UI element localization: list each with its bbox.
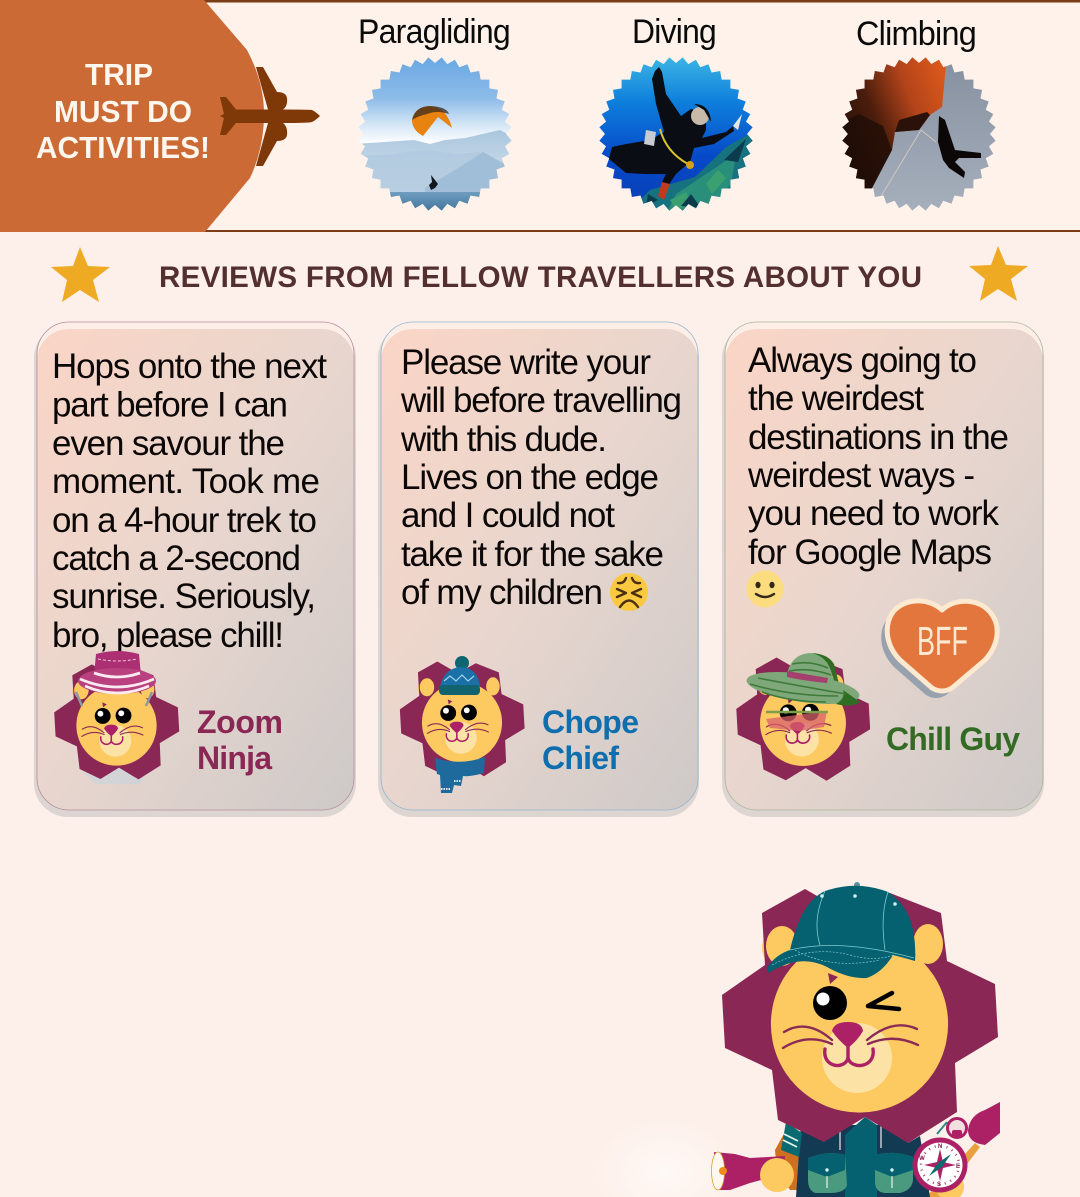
head xyxy=(722,889,998,1143)
heading: diving: Diving xyxy=(632,13,716,51)
tail xyxy=(926,1102,1000,1197)
banner title: MUST DO xyxy=(54,94,192,129)
badge: BFF heart: BFF xyxy=(917,618,968,664)
compass: S xyxy=(937,1182,941,1188)
review text: Always going to xyxy=(748,341,977,380)
lion avatar: beanie and scarf xyxy=(400,656,525,793)
sleeve xyxy=(781,1122,802,1157)
heading: climbing: Climbing xyxy=(856,15,976,53)
review text: Lives on the edge xyxy=(401,458,659,497)
review text: Please write your xyxy=(401,343,651,382)
lion name xyxy=(197,704,283,776)
review text: will before travelling xyxy=(400,381,682,420)
review text: destinations in the xyxy=(748,418,1009,457)
lion name: Ninja xyxy=(197,740,272,776)
review text: the weirdest xyxy=(748,379,924,418)
lion name xyxy=(542,704,639,776)
review text: with this dude. xyxy=(400,420,607,459)
review text: you need to work xyxy=(748,494,1000,533)
badge: BFF heart xyxy=(881,601,997,698)
flashlight xyxy=(712,1152,785,1190)
photo: diving xyxy=(596,54,756,214)
icon: smile emoji xyxy=(746,570,784,608)
photo: climbing xyxy=(839,54,999,214)
panel: review card 1 xyxy=(34,322,356,817)
review text: catch a 2-second xyxy=(52,539,301,578)
icon: left star xyxy=(51,247,110,302)
right pocket xyxy=(875,1153,913,1193)
heading: reviews xyxy=(51,246,1028,302)
cap xyxy=(767,882,915,978)
banner title xyxy=(36,57,210,165)
banner shape xyxy=(0,0,264,232)
lion avatar: hat xyxy=(54,651,179,784)
compass xyxy=(912,1118,968,1192)
banner title: ACTIVITIES! xyxy=(36,130,210,165)
review text: even savour the xyxy=(52,424,285,463)
compass: N xyxy=(938,1144,942,1150)
compass: W xyxy=(919,1156,925,1162)
panel: trip must do activities xyxy=(0,0,1080,232)
review text: bro, please chill! xyxy=(52,616,284,655)
lion avatar: sun hat xyxy=(736,653,870,781)
review text: and I could not xyxy=(401,496,615,535)
panel: review card 2 xyxy=(378,322,699,817)
compass: E xyxy=(956,1164,960,1170)
lion name: Chief xyxy=(542,740,619,776)
icon: persevering emoji xyxy=(610,573,648,611)
lion name: Chope xyxy=(542,704,639,740)
review text: on a 4-hour trek to xyxy=(52,501,317,540)
panel: review card 3 xyxy=(722,322,1044,817)
review text: sunrise. Seriously, xyxy=(52,577,316,616)
review text: part before I can xyxy=(52,385,288,424)
backpack strap xyxy=(775,1130,800,1190)
review text xyxy=(52,347,327,655)
icon: right star xyxy=(969,246,1028,301)
review text: take it for the sake xyxy=(401,535,664,574)
reviews title: REVIEWS FROM FELLOW TRAVELLERS ABOUT YOU xyxy=(159,261,922,294)
mascot: lion explorer xyxy=(593,882,1000,1197)
review text xyxy=(400,343,682,612)
heading: paragliding: Paragliding xyxy=(358,13,510,51)
left pocket xyxy=(808,1153,847,1193)
review text xyxy=(747,341,1009,572)
review text: weirdest ways - xyxy=(747,456,975,495)
review text: moment. Took me xyxy=(52,462,320,501)
review text: of my children xyxy=(401,573,603,612)
review text: Hops onto the next xyxy=(52,347,327,386)
icon: airplane xyxy=(220,67,320,166)
other hand xyxy=(936,1173,964,1197)
light beam xyxy=(593,1117,737,1197)
banner title: TRIP xyxy=(85,57,153,92)
vest xyxy=(796,1117,930,1197)
hand xyxy=(760,1158,794,1192)
wink xyxy=(868,993,899,1009)
photo: paragliding xyxy=(355,54,515,214)
eye xyxy=(813,986,847,1020)
lion name: Chill Guy xyxy=(886,721,1020,757)
review text: for Google Maps xyxy=(748,533,992,572)
lion name: Zoom xyxy=(197,704,283,740)
